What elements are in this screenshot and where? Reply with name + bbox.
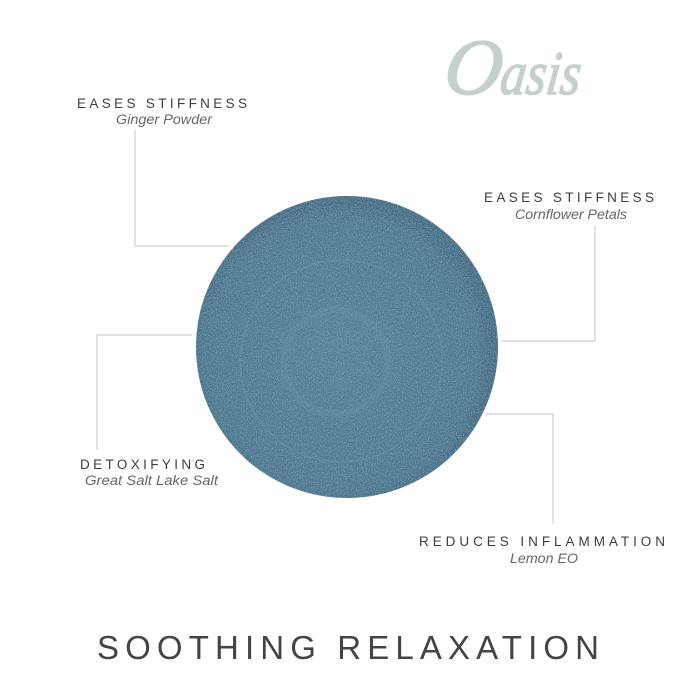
- label: reduces inflammation, lemon EO: [419, 534, 665, 566]
- label: reduces inflammation, lemon EO: REDUCES INFLAMMATION: [419, 534, 665, 549]
- connector: cornflower petals: [501, 226, 595, 341]
- label: detoxifying, great salt lake salt: DETOXIFYING: [80, 457, 205, 472]
- connector: ginger powder: [135, 130, 229, 246]
- label: detoxifying, great salt lake salt: [80, 457, 219, 488]
- label: eases stiffness, ginger powder: Ginger Powder: [116, 112, 213, 127]
- title: Oasis: Oasis: [440, 23, 587, 112]
- connector: great salt lake salt: [97, 335, 192, 450]
- label: eases stiffness, cornflower petals: [484, 190, 654, 222]
- label: eases stiffness, ginger powder: [77, 96, 247, 127]
- label: eases stiffness, cornflower petals: Cornflower Petals: [515, 207, 627, 222]
- label: detoxifying, great salt lake salt: Great Salt Lake Salt: [85, 473, 219, 488]
- label: reduces inflammation, lemon EO: Lemon EO: [510, 551, 579, 566]
- footer heading: SOOTHING RELAXATION: [97, 629, 599, 666]
- bath bomb: [196, 196, 498, 498]
- label: eases stiffness, ginger powder: EASES STIFFNESS: [77, 96, 247, 111]
- label: eases stiffness, cornflower petals: EASES STIFFNESS: [484, 190, 654, 205]
- connector: lemon EO: [486, 414, 553, 524]
